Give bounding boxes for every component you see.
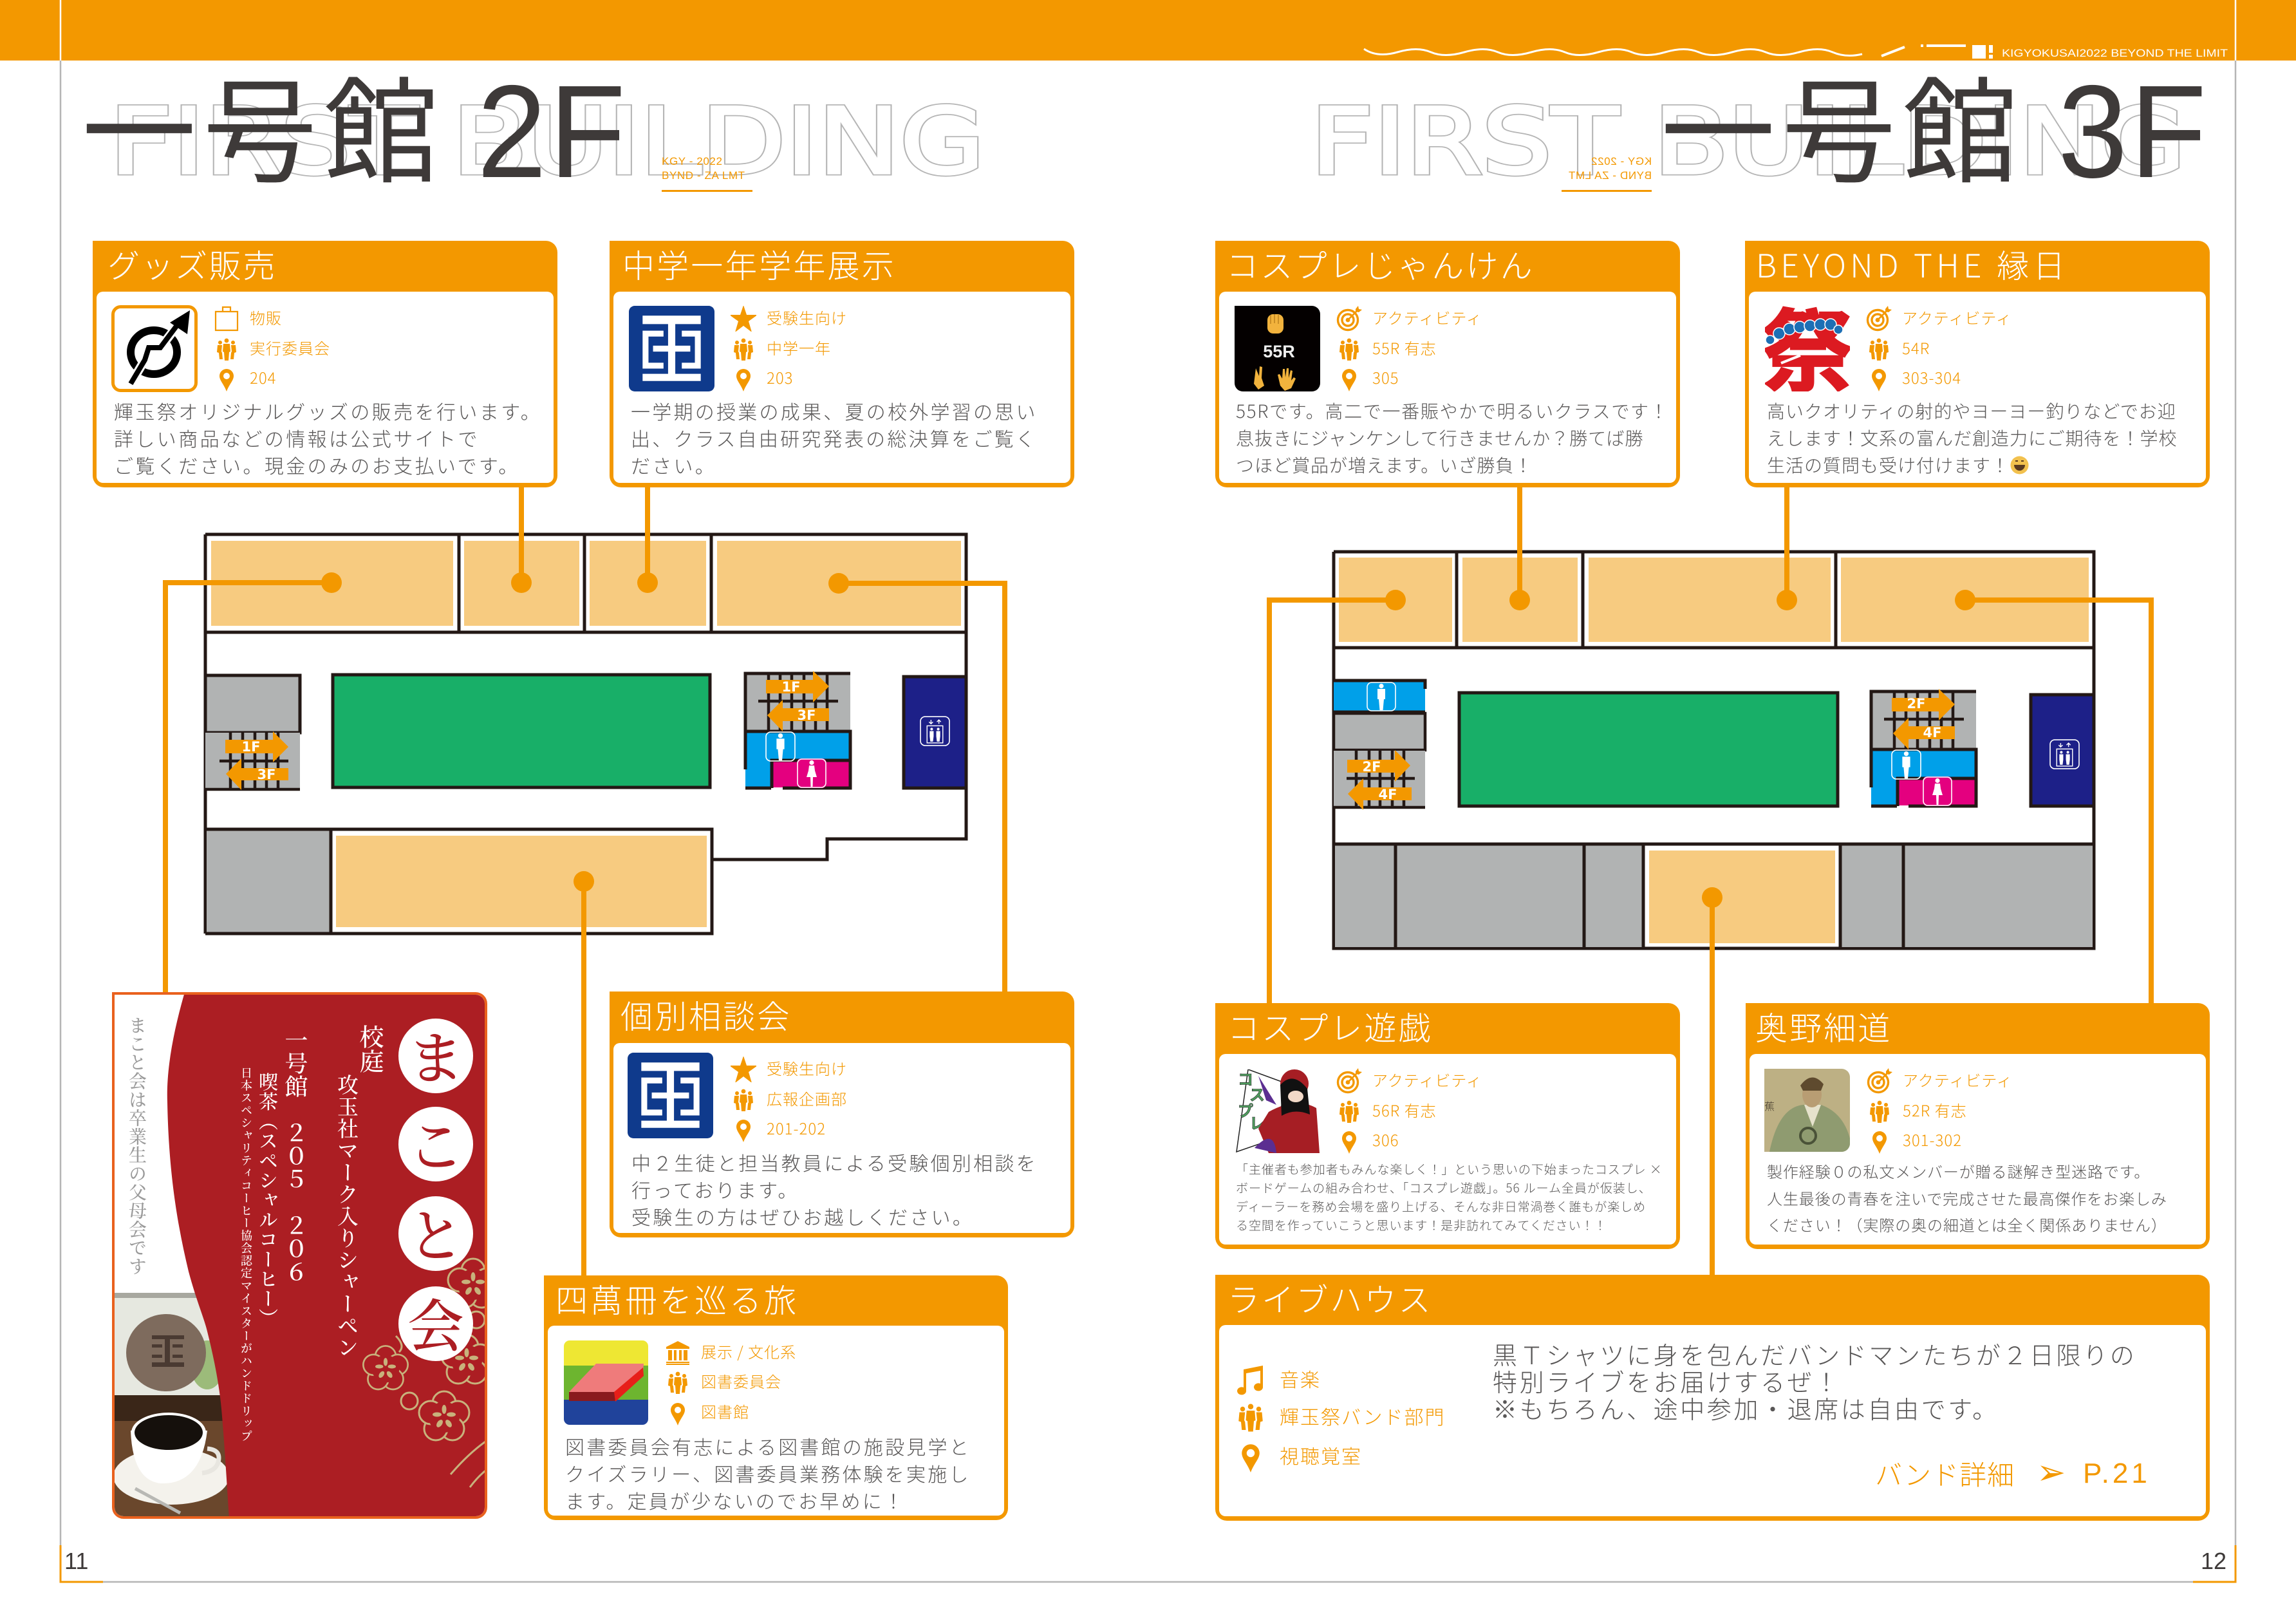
- logo circle と: と: [407, 1192, 464, 1273]
- page number 12: 12: [2201, 1548, 2226, 1574]
- description: 受験生の方はぜひお越しください。: [631, 1202, 974, 1230]
- left stairs: [205, 675, 300, 790]
- bottom rooms: [205, 829, 712, 934]
- icon: school logo: [628, 1053, 713, 1138]
- left stairs: 3F: [257, 767, 275, 782]
- top row rooms: [205, 534, 966, 934]
- right stairs and toilets: 4F: [1923, 725, 1941, 740]
- card title: BEYOND THE 縁日: [1756, 241, 2069, 287]
- small tag right (mirrored): KGY - 2022: [1591, 155, 1652, 167]
- meta: category: 受験生向け: [767, 1057, 847, 1079]
- connector lines and dots: [165, 483, 1005, 1276]
- heading: 一号館 2F: [82, 41, 628, 207]
- meta icon: [1867, 306, 1892, 331]
- panel: コスプレ遊戯: [1215, 1003, 1680, 1249]
- courtyard: [333, 675, 710, 787]
- text: 校庭: 校庭: [354, 1024, 389, 1073]
- description: [114, 397, 542, 479]
- heading: 一号館 3F: [1661, 41, 2209, 207]
- icon: people: [1235, 1401, 1267, 1433]
- meta: room: 305: [1372, 366, 1399, 388]
- left stairs: 1F: [242, 739, 260, 755]
- small tag left: [662, 155, 752, 192]
- meta icon: [219, 369, 234, 391]
- description: 「主催者も参加者もみんな楽しく！」という思いの下始まったコスプレ ×: [1236, 1160, 1663, 1178]
- connector lines and dots: [1269, 483, 2151, 1276]
- description: [1236, 1160, 1663, 1234]
- meta: category: アクティビティ: [1903, 1068, 2013, 1091]
- logo circle 会: 会: [407, 1282, 464, 1363]
- meta icon: [1339, 339, 1359, 361]
- panel: まこと会 advertisement: [112, 992, 487, 1519]
- icon: 55R janken: [1235, 306, 1320, 391]
- description: [1767, 1158, 2167, 1237]
- meta: organizer: 55R 有志: [1372, 336, 1437, 359]
- right stairs and toilets: 1F: [782, 679, 800, 695]
- description: 中２生徒と担当教員による受験個別相談を: [631, 1148, 1038, 1176]
- bottom rooms: [1334, 844, 2094, 948]
- icon: goods logo: [111, 305, 198, 392]
- meta icon: [1336, 306, 1362, 331]
- elevator: [904, 677, 966, 788]
- icon: school logo: [629, 306, 714, 391]
- meta: room: 201-202: [767, 1116, 826, 1139]
- heading: 一号館 2F: 一号館: [82, 41, 445, 207]
- small tag right (mirrored): [1562, 155, 1652, 192]
- left toilet and stairs: [1334, 680, 1425, 810]
- meta icon: [215, 306, 238, 331]
- meta icon: [217, 339, 236, 361]
- meta icon: [665, 1400, 691, 1425]
- header decoration with running title: [1363, 44, 2228, 59]
- left toilet and stairs: 2F: [1363, 759, 1381, 775]
- meta icon: [1867, 1098, 1892, 1124]
- icon: cosplay illustration: プ: [1238, 1098, 1253, 1121]
- meta: room: 203: [767, 366, 794, 388]
- meta icon: [1867, 1128, 1892, 1154]
- icon: Basho portrait: 蕉: [1764, 1098, 1775, 1113]
- photo: coffee: [113, 1395, 237, 1518]
- meta: category: 受験生向け: [767, 306, 847, 328]
- description: ※もちろん、途中参加・退席は自由です。: [1493, 1390, 1999, 1425]
- card title: 個別相談会: [621, 992, 792, 1038]
- meta icon: [665, 1369, 691, 1395]
- panel: グッズ販売: [93, 241, 557, 487]
- right stairs and toilets: [745, 671, 850, 788]
- heading: 一号館 3F: 3F: [2058, 58, 2209, 205]
- meta: room: 図書館: [701, 1400, 749, 1422]
- text: 攻玉社マーク入りシャーペン: 攻玉社マーク入りシャーペン: [333, 1074, 363, 1358]
- panel: 四萬冊を巡る旅: [544, 1275, 1008, 1520]
- panel: コスプレじゃんけん: [1215, 241, 1680, 487]
- right stairs and toilets: 3F: [798, 708, 816, 723]
- meta: category: アクティビティ: [1372, 1068, 1482, 1091]
- meta icon: [731, 306, 756, 332]
- meta: room: 視聴覚室: [1280, 1441, 1362, 1469]
- meta icon: [1869, 339, 1889, 361]
- icon: Basho portrait: [1764, 1069, 1850, 1152]
- card title: ライブハウス: [1227, 1275, 1433, 1321]
- icon: music note: [1235, 1364, 1267, 1396]
- meta: organizer: 54R: [1902, 336, 1930, 359]
- description: 輝玉祭オリジナルグッズの販売を行います。: [114, 397, 542, 425]
- description: ディーラーを務め会場を盛り上げる、そんな非日常渦巻く誰もが楽しめ: [1236, 1198, 1646, 1215]
- description: 一学期の授業の成果、夏の校外学習の思い: [631, 397, 1038, 425]
- meta icon: [1336, 1128, 1362, 1154]
- text: 日本スペシャリティコーヒー協会: 日本スペシャリティコーヒー協会認定マイスターがハンドドリップ: [238, 1067, 255, 1442]
- description: えします！文系の富んだ創造力にご期待を！学校: [1767, 425, 2177, 451]
- panel: 中学一年学年展示: [610, 241, 1074, 487]
- floor map 2F with connectors: [163, 487, 1007, 1275]
- text: 喫茶: 喫茶（スペシャルコーヒー）: [254, 1072, 283, 1328]
- meta: category: 展示 / 文化系: [701, 1340, 796, 1362]
- right stairs and toilets: 2F: [1907, 696, 1925, 711]
- description: 図書委員会有志による図書館の施設見学と: [565, 1432, 971, 1460]
- red background with photos and plum pattern: [115, 995, 485, 1516]
- description: [1493, 1340, 2136, 1422]
- top row rooms: [1334, 552, 2094, 948]
- meta: organizer: 52R 有志: [1903, 1098, 1967, 1121]
- panel: ライブハウス: [1215, 1275, 2210, 1521]
- description: [631, 397, 1038, 479]
- icon: cosplay illustration: レ: [1249, 1111, 1265, 1133]
- meta: category: 音楽: [1280, 1364, 1321, 1393]
- card title: 奥野細道: [1755, 1003, 1892, 1049]
- right stairs and toilets: [1871, 689, 1976, 806]
- arrow: ➢: [2037, 1452, 2066, 1492]
- description: [565, 1433, 971, 1514]
- meta: room: 204: [250, 366, 277, 388]
- icon: book: [564, 1340, 648, 1425]
- meta icon: [665, 1340, 691, 1366]
- meta: category: アクティビティ: [1372, 306, 1482, 328]
- description: ださい。: [631, 451, 716, 479]
- description: ボードゲームの組み合わせ、「コスプレ遊戯」。56 ルーム全員が仮装し、: [1236, 1179, 1652, 1196]
- meta: room: 301-302: [1903, 1128, 1962, 1151]
- link: band details: バンド詳細: [1875, 1454, 2015, 1493]
- description: ください！（実際の奥の細道とは全く関係ありません）: [1767, 1213, 2167, 1236]
- meta: room: 303-304: [1902, 366, 1961, 388]
- text: 一号館 205 206: 一号館 ２０５ ２０６: [280, 1028, 313, 1283]
- description: 生活の質問も受け付けます！: [1767, 452, 2010, 478]
- description: [1767, 397, 2177, 478]
- small tag right (mirrored): BYND - ZA LMT: [1568, 169, 1652, 182]
- meta: category: 物販: [250, 306, 282, 328]
- description: 出、クラス自由研究発表の総決算をご覧く: [631, 424, 1037, 452]
- meta icon: [1872, 369, 1886, 391]
- meta: room: 306: [1372, 1128, 1399, 1151]
- meta icon: [1336, 1068, 1362, 1094]
- panel: 奥野細道: [1746, 1003, 2210, 1249]
- meta: organizer: 広報企画部: [767, 1087, 847, 1109]
- card title: コスプレじゃんけん: [1226, 241, 1535, 287]
- page number 11: 11: [64, 1548, 88, 1574]
- meta icon: [731, 1116, 756, 1142]
- page reference: P.21: [2083, 1458, 2151, 1489]
- description: る空間を作っていこうと思います！是非訪れてみてください！！: [1236, 1216, 1607, 1234]
- floor map 3F with connectors: [1267, 487, 2154, 1275]
- card title: 中学一年学年展示: [622, 241, 896, 287]
- small tag left: KGY - 2022: [662, 155, 723, 167]
- meta: organizer: 図書委員会: [701, 1369, 781, 1392]
- photo: monaka: [115, 1293, 230, 1395]
- elevator: [2031, 695, 2094, 806]
- description: ます。定員が少ないのでお早めに！: [565, 1486, 905, 1514]
- logo circle こ: こ: [407, 1102, 464, 1183]
- meta icon: [1867, 1068, 1892, 1094]
- card title: グッズ販売: [107, 241, 277, 287]
- description: 人生最後の青春を注いで完成させた最高傑作をお楽しみ: [1767, 1186, 2167, 1209]
- description: つほど賞品が増えます。いざ勝負！: [1236, 452, 1533, 478]
- meta: organizer: 実行委員会: [250, 336, 330, 359]
- left toilet and stairs: 4F: [1379, 787, 1397, 802]
- top orange band: [0, 0, 2296, 61]
- meta icon: [1342, 369, 1356, 391]
- meta: category: アクティビティ: [1902, 306, 2012, 328]
- description: 詳しい商品などの情報は公式サイトで: [114, 424, 480, 452]
- header decoration with running title: KIGYOKUSAI2022 BEYOND THE LIMIT: [2002, 47, 2228, 59]
- meta: organizer: 輝玉祭バンド部門: [1280, 1402, 1446, 1430]
- icon: cosplay illustration: [1235, 1069, 1321, 1153]
- meta: organizer: 中学一年: [767, 336, 831, 359]
- card title: コスプレ遊戯: [1227, 1003, 1433, 1049]
- icon: cosplay illustration: ス: [1249, 1082, 1265, 1105]
- courtyard: [1459, 693, 1838, 806]
- icon: smile emoji: [2010, 456, 2029, 475]
- description: 黒Ｔシャツに身を包んだバンドマンたちが２日限りの: [1493, 1336, 2136, 1371]
- description: 息抜きにジャンケンして行きませんか？勝てば勝: [1236, 425, 1644, 451]
- meta icon: [736, 369, 751, 391]
- logo circle ま: ま: [407, 1014, 464, 1095]
- description: [631, 1149, 1038, 1230]
- panel: BEYOND THE 縁日: [1745, 241, 2210, 487]
- red curved field: [167, 992, 487, 1519]
- heading: 一号館 2F: 2F: [477, 58, 628, 205]
- description: 製作経験０の私文メンバーが贈る謎解き型迷路です。: [1767, 1160, 2150, 1182]
- meta icon: [734, 339, 753, 361]
- plum blossom pattern: [363, 1259, 498, 1487]
- icon: pin: [1235, 1440, 1267, 1472]
- meta: organizer: 56R 有志: [1372, 1098, 1437, 1121]
- description: 行っております。: [631, 1175, 799, 1203]
- icon: 55R janken: 55R: [1263, 342, 1295, 361]
- description: 55Rです。高二で一番賑やかで明るいクラスです！: [1236, 398, 1668, 424]
- meta icon: [1336, 1098, 1362, 1124]
- description: ご覧ください。現金のみのお支払いです。: [114, 451, 520, 479]
- panel: 個別相談会: [610, 992, 1074, 1237]
- description: 高いクオリティの射的やヨーヨー釣りなどでお迎: [1767, 398, 2176, 424]
- description: クイズラリー、図書委員業務体験を実施し: [565, 1459, 971, 1487]
- card title: 四萬冊を巡る旅: [555, 1275, 799, 1322]
- heading: 一号館 3F: 一号館: [1661, 41, 2024, 207]
- text: まこと会は卒業生の父母会です: まこと会は卒業生の父母会です: [125, 1016, 151, 1275]
- small tag left: BYND - ZA LMT: [662, 169, 745, 182]
- meta icon: [731, 1057, 756, 1082]
- description: [1236, 398, 1668, 478]
- description: 特別ライブをお届けするぜ！: [1493, 1363, 1841, 1398]
- meta icon: [731, 1087, 756, 1113]
